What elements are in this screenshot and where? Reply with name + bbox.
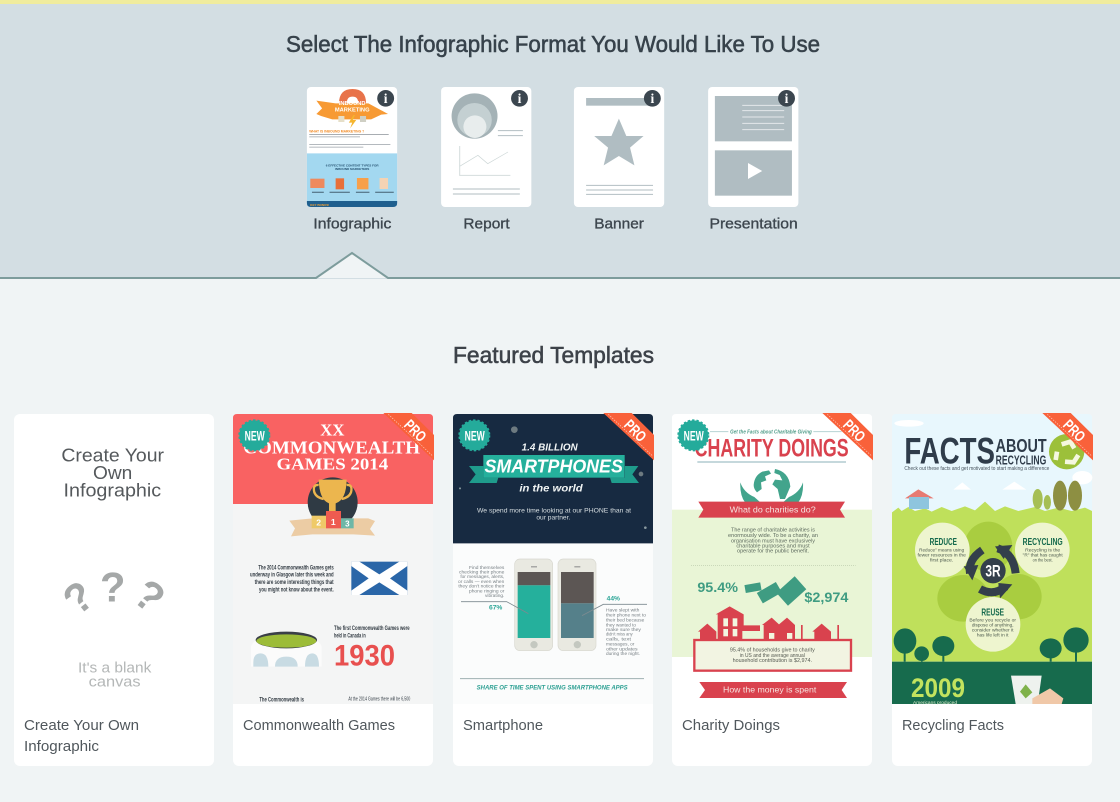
template preview: 1 xyxy=(331,517,336,527)
PRO ribbon xyxy=(822,413,873,460)
template preview: Reduce" means using xyxy=(919,548,965,553)
PRO ribbon: PRO xyxy=(839,417,868,446)
template preview: Get the Facts about Charitable Giving xyxy=(730,429,812,435)
template preview: household contribution is $2,974. xyxy=(733,658,812,664)
template preview: "R" that has caught xyxy=(1023,553,1063,558)
PRO ribbon xyxy=(383,413,434,460)
format: infographic: 6 EFFECTIVE CONTENT TYPES FOR xyxy=(326,163,379,167)
template preview: What do charities do? xyxy=(730,504,816,514)
info badges: i xyxy=(650,91,654,106)
format labels: Report xyxy=(463,216,511,233)
PRO ribbon: PRO xyxy=(1059,417,1088,446)
heading: select format: Select The Infographic Format You Would Like To Use xyxy=(286,31,820,57)
template preview: 1.4 BILLION xyxy=(522,442,578,453)
template preview: you might not know about the event. xyxy=(259,587,334,594)
template preview: $2,974 xyxy=(804,589,849,605)
blank canvas preview: It's a blank xyxy=(78,660,152,676)
format labels: Infographic xyxy=(313,216,392,233)
PRO ribbon: PRO xyxy=(620,417,649,446)
card: create your own xyxy=(14,414,214,766)
template preview: vibrating. xyxy=(485,593,504,598)
card: commonwealth games xyxy=(233,414,433,766)
template preview: Check out these facts and get motivated to start making a difference xyxy=(904,466,1050,472)
template preview xyxy=(233,413,434,704)
info badges xyxy=(377,90,795,107)
info badges: i xyxy=(785,91,789,106)
template preview: 67% xyxy=(489,605,503,611)
card: charity doings xyxy=(672,414,872,766)
template preview: charitable purposes and must xyxy=(736,543,810,549)
blank canvas preview: canvas xyxy=(89,675,141,691)
template preview: enormously wide. To be a charity, an xyxy=(728,533,818,539)
NEW badge: NEW xyxy=(684,427,704,443)
template preview: checking their phone xyxy=(459,570,505,575)
template preview: XX xyxy=(320,421,344,440)
template preview: during the night. xyxy=(606,651,640,656)
blank canvas preview: ? xyxy=(54,571,103,624)
header band xyxy=(0,0,1120,279)
template preview: How the money is spent xyxy=(723,684,817,694)
card caption: Smartphone xyxy=(463,717,543,734)
template preview: fewer resources in the xyxy=(918,553,966,558)
card: smartphone xyxy=(453,414,653,766)
template preview xyxy=(672,413,873,698)
NEW badge xyxy=(678,420,708,450)
template preview: first place. xyxy=(930,558,953,563)
template preview: make sure they xyxy=(606,627,642,632)
template preview: COMMONWEALTH xyxy=(243,437,420,457)
template preview: held in Canada in xyxy=(334,632,366,639)
template preview: 1930 xyxy=(334,640,395,673)
template preview: 95.4% of households give to charity xyxy=(730,648,815,654)
template preview: operate for the public benefit. xyxy=(737,548,809,554)
template preview: dispose of anything, xyxy=(972,623,1014,628)
template preview: Have slept with xyxy=(606,608,640,613)
NEW badge xyxy=(459,420,489,450)
format: infographic: WHAT IS INBOUND MARKETING ? xyxy=(309,130,364,134)
template preview: phone ringing or xyxy=(469,588,505,593)
template preview: Find themselves xyxy=(469,565,504,570)
template preview: they wanted to xyxy=(606,622,637,627)
blank canvas preview xyxy=(54,445,174,691)
template preview: didn't miss any xyxy=(606,632,633,637)
template preview: The first Commonwealth Games were xyxy=(334,625,410,632)
template preview: organisation must have exclusively xyxy=(731,538,816,544)
template preview xyxy=(453,413,654,691)
template preview: REUSE xyxy=(981,608,1004,619)
template preview: RECYCLING xyxy=(1023,537,1063,548)
format: presentation xyxy=(708,87,798,207)
card caption: Create Your Own xyxy=(24,717,139,734)
format selector xyxy=(306,87,798,233)
template preview: on the best. xyxy=(1033,558,1053,563)
template preview: At the 2014 Games there will be 6,500 xyxy=(348,697,410,703)
template preview: underway in Glasgow later this week and xyxy=(250,572,334,579)
template preview: for messages, alerts, xyxy=(460,574,504,579)
card caption xyxy=(24,717,139,755)
format: report xyxy=(441,87,531,207)
info badges: i xyxy=(384,91,388,106)
template preview: REDUCE xyxy=(930,537,957,548)
template preview: messages, or xyxy=(606,641,635,646)
top yellow strip xyxy=(0,0,1120,4)
template preview: SMARTPHONES xyxy=(484,456,624,477)
template preview: has life left in it xyxy=(977,633,1009,638)
template preview: 2 xyxy=(316,518,321,528)
template preview: or calls — even when xyxy=(458,579,505,584)
template preview: GAMES 2014 xyxy=(276,454,389,473)
card: recycling facts xyxy=(892,414,1092,766)
template preview: their phone next to xyxy=(606,613,647,618)
card caption: Infographic xyxy=(24,738,100,755)
template preview: Americans produced xyxy=(913,700,957,705)
template preview: CHARITY DOINGS xyxy=(695,435,849,463)
blank canvas preview: ? xyxy=(100,564,125,611)
blank canvas preview: Infographic xyxy=(64,479,161,500)
format pointer and divider xyxy=(0,252,1120,279)
template preview: We spend more time looking at our PHONE than at xyxy=(477,508,631,515)
template preview: they don't notice their xyxy=(458,584,505,589)
template preview: consider whether it xyxy=(972,628,1014,633)
format labels: Presentation xyxy=(709,216,798,233)
template preview: 95.4% xyxy=(697,579,739,595)
NEW badge: NEW xyxy=(465,427,485,443)
template preview xyxy=(892,413,1093,705)
template preview: FACTS xyxy=(904,429,995,471)
template preview: RECYCLING xyxy=(996,453,1046,467)
PRO ribbon xyxy=(603,413,654,460)
template preview: other updates xyxy=(606,646,638,651)
NEW badge xyxy=(239,420,269,450)
format: banner xyxy=(574,87,664,207)
format labels xyxy=(313,216,798,233)
template preview: in US and the average annual xyxy=(740,653,805,659)
format: infographic: INBOUND xyxy=(339,101,366,107)
template preview: our partner. xyxy=(536,515,570,522)
format: infographic: MARKETING xyxy=(335,107,370,113)
PRO ribbon: PRO xyxy=(400,417,429,446)
format: infographic: INBOUND MARKETERS xyxy=(335,167,369,171)
heading: featured templates: Featured Templates xyxy=(453,342,654,368)
template preview: The range of charitable activities is xyxy=(731,528,816,534)
info badges: i xyxy=(518,91,522,106)
template preview: Before you recycle or xyxy=(969,618,1016,623)
template preview: there are some interesting things that xyxy=(255,579,334,586)
NEW badge: NEW xyxy=(245,427,265,443)
card caption: Recycling Facts xyxy=(902,717,1004,734)
template preview: The 2014 Commonwealth Games gets xyxy=(258,564,334,571)
format: infographic: KEY BONUS! xyxy=(310,203,329,207)
template preview: ABOUT xyxy=(996,435,1047,456)
format labels: Banner xyxy=(594,216,644,233)
template preview: in the world xyxy=(519,483,584,494)
card caption: Charity Doings xyxy=(682,717,780,734)
template preview: SHARE OF TIME SPENT USING SMARTPHONE APPS xyxy=(477,685,628,691)
template preview: The Commonwealth is xyxy=(259,696,304,703)
blank canvas preview: ? xyxy=(125,570,174,622)
template preview: Recycling is the xyxy=(1025,548,1061,553)
format: infographic xyxy=(307,87,397,207)
blank canvas preview: Create Your xyxy=(61,445,164,466)
template preview: 3 xyxy=(345,519,350,528)
template preview: their bed because xyxy=(606,617,645,622)
card caption: Commonwealth Games xyxy=(243,717,395,734)
template preview: 44% xyxy=(607,597,621,603)
template preview: calls, text xyxy=(606,637,632,642)
blank canvas preview: Own xyxy=(93,462,132,483)
template preview: 3R xyxy=(985,562,1001,581)
template preview: 2009 xyxy=(911,673,965,703)
PRO ribbon xyxy=(1042,413,1093,460)
